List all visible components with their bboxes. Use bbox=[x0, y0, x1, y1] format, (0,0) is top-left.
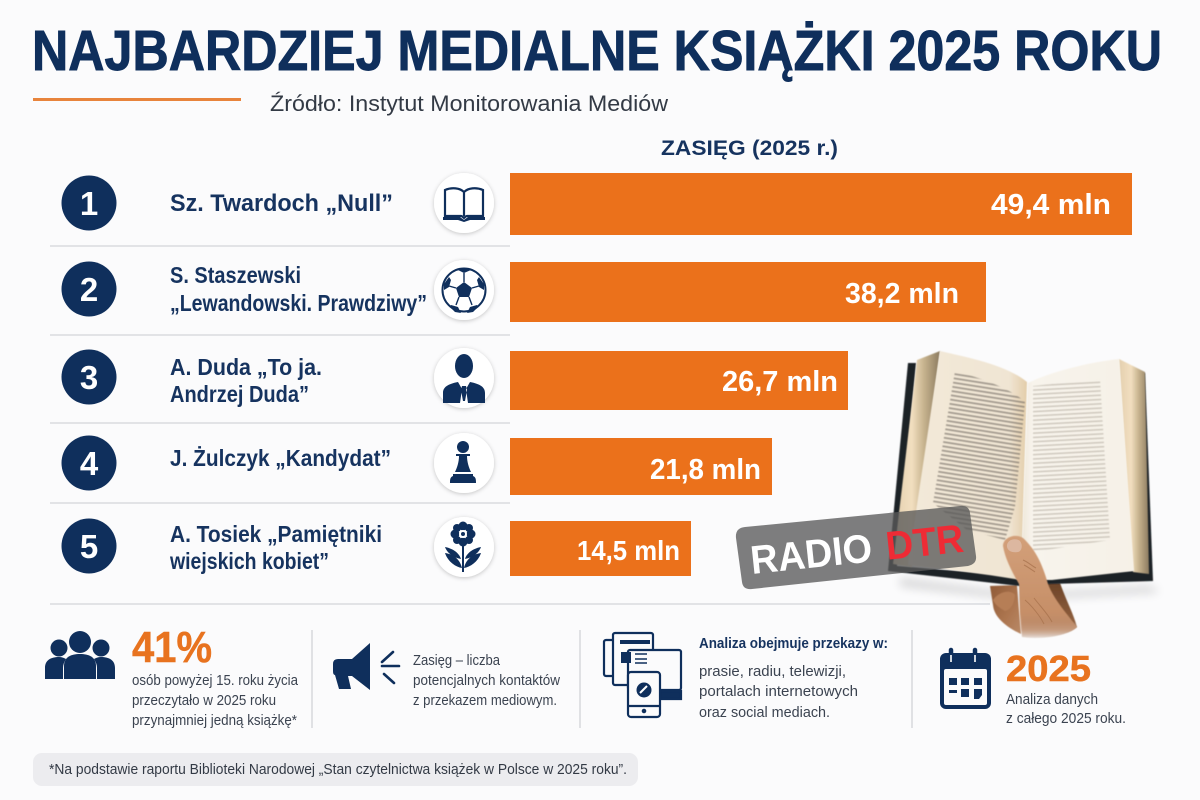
41 percent description bbox=[132, 672, 299, 729]
icon: media devices bbox=[604, 633, 681, 717]
book name 2 bbox=[170, 262, 427, 316]
scope list: portalach internetowych bbox=[699, 683, 858, 700]
icon: flower bbox=[434, 517, 494, 577]
book name 4: J. Żulczyk „Kandydat” bbox=[170, 445, 391, 471]
book name 5: A. Tosiek „Pamiętniki bbox=[170, 521, 382, 547]
book name 1: Sz. Twardoch „Null” bbox=[170, 190, 393, 217]
ranking row 5 bbox=[62, 517, 691, 577]
bar 3: 26,7 mln bbox=[510, 351, 848, 410]
reach description bbox=[413, 653, 560, 709]
2025 description: z całego 2025 roku. bbox=[1006, 710, 1126, 727]
scope list: prasie, radiu, telewizji, bbox=[699, 663, 846, 680]
source line: Źródło: Instytut Monitorowania Mediów bbox=[270, 91, 669, 116]
icon: megaphone bbox=[333, 643, 399, 690]
ranking row 1 bbox=[62, 173, 1132, 235]
reach description: z przekazem mediowym. bbox=[413, 693, 557, 709]
right page text bbox=[1033, 379, 1110, 552]
icon: people bbox=[45, 631, 115, 679]
bar 4: 21,8 mln: 21,8 mln bbox=[650, 454, 761, 486]
2025 description bbox=[1006, 691, 1126, 727]
scope list: oraz social mediach. bbox=[699, 704, 830, 721]
bar 5: 14,5 mln: 14,5 mln bbox=[577, 535, 680, 566]
chart heading: ZASIĘG (2025 r.) bbox=[661, 137, 838, 160]
rank badge 3 bbox=[62, 350, 116, 404]
thumb bbox=[1003, 536, 1077, 638]
rank badge 4 bbox=[62, 436, 116, 490]
reach description: Zasięg – liczba bbox=[413, 653, 501, 669]
icon: calendar bbox=[940, 650, 991, 709]
footnote: *Na podstawie raportu Biblioteki Narodowej „Stan czytelnictwa książek w Polsce w 2025 roku”. bbox=[49, 761, 627, 778]
bar 5: 14,5 mln bbox=[510, 521, 691, 576]
reach description: potencjalnych kontaktów bbox=[413, 673, 560, 689]
book name 5 bbox=[169, 521, 382, 574]
book name 3 bbox=[170, 354, 322, 407]
41 percent description: osób powyżej 15. roku życia bbox=[132, 672, 299, 689]
41 percent description: przynajmniej jedną książkę* bbox=[132, 712, 297, 729]
scope heading: Analiza obejmuje przekazy w: bbox=[699, 635, 888, 652]
book name 3: Andrzej Duda” bbox=[170, 381, 309, 407]
41 percent description: przeczytało w 2025 roku bbox=[132, 692, 276, 709]
watermark: RADIO DTR: RADIO bbox=[748, 526, 874, 583]
2025 description: Analiza danych bbox=[1006, 691, 1098, 708]
book name 5: wiejskich kobiet” bbox=[169, 548, 329, 574]
2025 value: 2025 bbox=[1006, 648, 1091, 689]
bar 1: 49,4 mln bbox=[510, 173, 1132, 235]
stat: 2025 data bbox=[940, 648, 1126, 727]
41 percent value: 41% bbox=[132, 623, 212, 672]
book name 2: S. Staszewski bbox=[170, 262, 301, 288]
book name 2: „Lewandowski. Prawdziwy” bbox=[170, 290, 427, 316]
rank badge 1: 1 bbox=[80, 185, 98, 222]
rank badge 3: 3 bbox=[80, 359, 98, 396]
scope of analysis bbox=[604, 633, 888, 721]
rank badge 2 bbox=[62, 262, 116, 316]
photo: open book held in hand bbox=[888, 351, 1160, 638]
watermark: RADIO DTR: DTR bbox=[884, 517, 966, 569]
book name 3: A. Duda „To ja. bbox=[170, 354, 322, 380]
icon: football bbox=[434, 260, 494, 320]
rank badge 5 bbox=[62, 518, 116, 574]
scope list bbox=[699, 663, 858, 721]
icon: chess pawn bbox=[434, 433, 494, 493]
definition: reach bbox=[333, 643, 560, 709]
bar 4: 21,8 mln bbox=[510, 438, 772, 495]
rank badge 5: 5 bbox=[80, 528, 98, 565]
title accent rule bbox=[33, 98, 241, 101]
icon: open book bbox=[434, 173, 494, 233]
bar 3: 26,7 mln: 26,7 mln bbox=[722, 366, 838, 398]
hand behind the book bbox=[990, 583, 1077, 638]
bar 2: 38,2 mln: 38,2 mln bbox=[845, 278, 959, 310]
right page bbox=[1021, 359, 1134, 580]
right page stack bbox=[1119, 359, 1149, 574]
rank badge 1 bbox=[62, 176, 116, 230]
bar 1: 49,4 mln: 49,4 mln bbox=[991, 189, 1111, 221]
ranking row 2 bbox=[62, 260, 986, 322]
watermark: RADIO DTR bbox=[736, 506, 976, 589]
ranking row 3 bbox=[62, 348, 848, 410]
stat: 41% readers bbox=[45, 623, 299, 729]
icon: man in suit bbox=[434, 348, 494, 408]
left page stack bbox=[893, 351, 940, 567]
left page text bbox=[933, 371, 1025, 540]
left page bbox=[908, 351, 1027, 580]
book cover bbox=[888, 363, 1153, 586]
footnote bbox=[33, 753, 638, 786]
ranking row 4 bbox=[62, 433, 772, 495]
rank badge 2: 2 bbox=[80, 271, 98, 308]
bar 2: 38,2 mln bbox=[510, 262, 986, 322]
rank badge 4: 4 bbox=[80, 445, 99, 482]
